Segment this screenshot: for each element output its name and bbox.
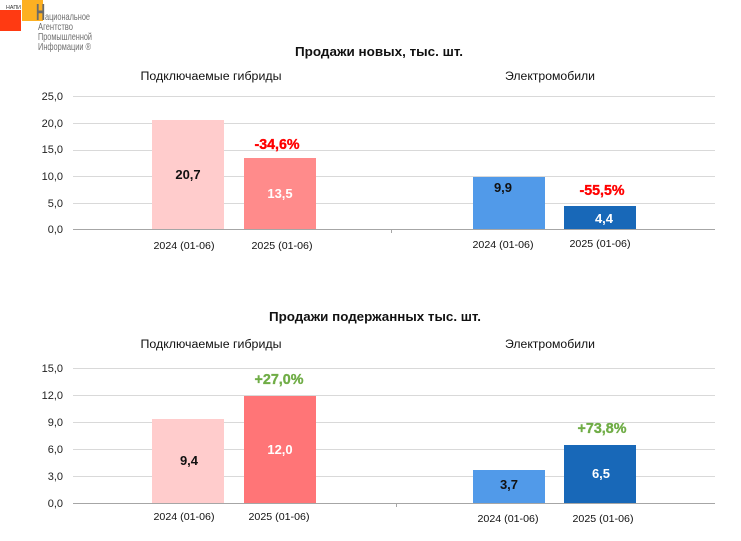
bar: hybrids 2025 new: 13,5 (267, 186, 293, 201)
bar: electric 2024 used: 3,7 (500, 477, 518, 492)
y axis labels, used: 12,0 (42, 390, 63, 402)
x axis labels, new: 2025 (01-06) (570, 238, 630, 250)
bar: electric 2024 new (473, 177, 545, 229)
logo: Информации ® (38, 41, 91, 53)
logo: НАПИ (6, 5, 21, 11)
y axis labels, new: 10,0 (42, 171, 63, 183)
change: hybrids new: -34,6% (254, 137, 300, 153)
logo: Агентство (38, 21, 73, 33)
x axis labels, used (154, 511, 634, 525)
y axis labels, used: 9,0 (48, 417, 63, 429)
y axis labels, new: 25,0 (42, 91, 63, 103)
bar: electric 2025 used (564, 445, 636, 503)
x axis labels, new: 2025 (01-06) (252, 240, 312, 252)
chart: used car sales (42, 363, 715, 525)
logo (0, 0, 92, 53)
bar: electric 2025 used: 6,5 (592, 466, 610, 481)
change: hybrids used: +27,0% (254, 372, 304, 388)
bar: hybrids 2025 used: 12,0 (267, 442, 293, 457)
subtitle: electric cars, used: Электромобили (505, 339, 595, 351)
title: used car sales: Продажи подержанных тыс. шт. (269, 310, 481, 324)
bar: hybrids 2024 new: 20,7 (175, 167, 201, 182)
bar: electric 2025 new: 4,4 (595, 211, 614, 226)
bar: hybrids 2024 new (152, 120, 224, 229)
bar: electric 2024 new: 9,9 (494, 180, 512, 195)
x axis labels, new (154, 238, 630, 252)
bar: hybrids 2024 used: 9,4 (180, 453, 199, 468)
x axis labels, used: 2025 (01-06) (248, 511, 310, 523)
x axis labels, used: 2025 (01-06) (572, 513, 634, 525)
title: new car sales: Продажи новых, тыс. шт. (295, 45, 463, 59)
bar: hybrids 2025 used (244, 396, 316, 503)
y axis labels, new: 5,0 (48, 198, 63, 210)
y axis labels, used (42, 363, 63, 510)
y axis labels, new: 0,0 (48, 224, 63, 236)
bar: electric 2024 used (473, 470, 545, 503)
bar: hybrids 2025 new (244, 158, 316, 229)
y axis labels, used: 6,0 (48, 444, 63, 456)
y axis labels, used: 0,0 (48, 498, 63, 510)
chart: new car sales (42, 91, 715, 252)
y axis labels, new (42, 91, 63, 236)
x axis labels, used: 2024 (01-06) (478, 513, 538, 525)
logo: Промышленной (38, 31, 92, 43)
y axis labels, new: 20,0 (42, 118, 63, 130)
subtitle: plug-in hybrids, used: Подключаемые гибриды (140, 339, 282, 351)
change: electric used: +73,8% (578, 421, 627, 437)
subtitle: plug-in hybrids, new: Подключаемые гибриды (140, 71, 282, 83)
x axis labels, used: 2024 (01-06) (154, 511, 214, 523)
change: electric new: -55,5% (580, 183, 625, 199)
x axis labels, new: 2024 (01-06) (154, 240, 214, 252)
bar: hybrids 2024 used (152, 419, 224, 503)
y axis labels, used: 15,0 (42, 363, 63, 375)
subtitle: electric cars, new: Электромобили (505, 71, 595, 83)
bar: electric 2025 new (564, 206, 636, 229)
x axis labels, new: 2024 (01-06) (472, 239, 534, 251)
logo: ациональное (45, 11, 90, 23)
y axis labels, used: 3,0 (48, 471, 63, 483)
y axis labels, new: 15,0 (42, 144, 63, 156)
